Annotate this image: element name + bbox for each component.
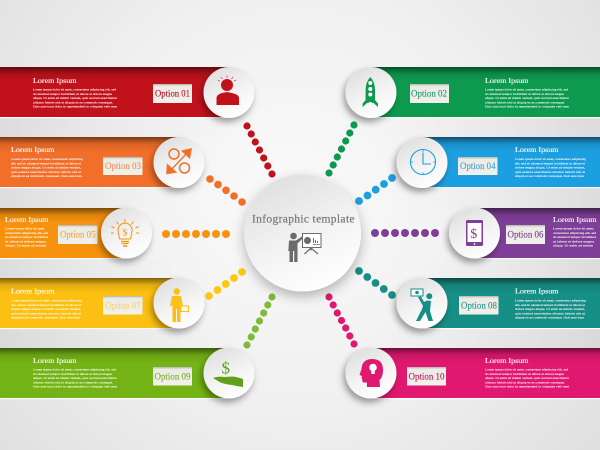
body text: aliqua. Ut enim ad minim (553, 244, 593, 248)
icon: hand with dollar (213, 358, 243, 387)
dotted connector: blue (355, 174, 396, 205)
body text: do eiusmod tempor incididunt ut labore et dolore magna (485, 92, 565, 96)
panel: option 07 (0, 278, 204, 328)
body text: elit, sed do eiusmod tempor incididunt ut labore et (11, 303, 81, 308)
body text: aliquip ex ea commodo consequat. Duis aute irure (11, 174, 83, 178)
heading: Lorem Ipsum (515, 286, 558, 296)
option label (459, 296, 498, 314)
body text: dolore magna aliqua. Ut enim ad minim veniam, (515, 307, 585, 312)
option label (153, 84, 192, 103)
icon: idea bulb with dollar: $ (123, 228, 128, 238)
icon: businessman with case (170, 288, 188, 322)
body text: Lorem ipsum dolor sit amet, consectetur adipiscing elit, sed (485, 88, 568, 92)
body text: do eiusmod tempor incididunt (5, 235, 48, 239)
option label (410, 84, 449, 103)
icon disc (154, 137, 204, 188)
body text: do eiusmod tempor incididunt (553, 235, 596, 239)
option label: Option 08 (461, 302, 497, 312)
option label: Option 06 (508, 230, 544, 240)
option label (458, 157, 498, 175)
dotted connector: pink (325, 293, 358, 348)
body text: elit, sed do eiusmod tempor incididunt ut labore et (515, 161, 585, 166)
body text: quis nostrud exercitation ullamco laboris nisi ut (515, 170, 585, 174)
icon disc (396, 137, 448, 188)
title: Infographic template (252, 214, 354, 226)
body text: do eiusmod tempor incididunt ut labore et dolore magna (33, 372, 113, 376)
panel: option 05 (0, 208, 152, 258)
option label: Option 01 (155, 90, 190, 100)
option label: Option 07 (106, 302, 141, 312)
body text (11, 298, 82, 320)
panel: option 01 (0, 67, 254, 118)
heading: Lorem Ipsum (11, 286, 54, 296)
panel: option 10 (346, 348, 600, 398)
body text: quis nostrud exercitation ullamco laboris nisi ut (11, 170, 81, 174)
dotted connector: green (325, 121, 358, 177)
body text (485, 368, 570, 388)
icon disc (204, 348, 254, 398)
body text: ullamco laboris nisi ut aliquip ex ea commodo consequat. (33, 380, 113, 384)
icon: man holding banknote (411, 289, 433, 321)
icon disc (101, 208, 152, 258)
icon: phone with dollar (466, 220, 483, 246)
body text (515, 157, 586, 178)
heading: Lorem Ipsum (5, 215, 48, 224)
icon disc (346, 67, 396, 118)
icon: percent arrows (167, 149, 191, 174)
body text: ut labore et dolore magna (553, 239, 595, 243)
panel: option 06 (449, 208, 600, 258)
body text: ullamco laboris nisi ut aliquip ex ea commodo consequat. (485, 100, 565, 104)
dotted connector: teal (355, 267, 396, 299)
body text: aliquip ex ea commodo consequat. Duis aute irure (515, 174, 584, 178)
body text: quis nostrud exercitation ullamco laboris nisi ut (515, 311, 585, 315)
body text: ullamco laboris nisi ut aliquip ex ea commodo consequat. (33, 100, 113, 104)
icon disc (204, 67, 254, 118)
dotted connector: orange (206, 175, 246, 206)
option label: Option 05 (60, 230, 96, 240)
body text: aliqua. Ut enim ad minim veniam, quis nostrud exercitation (33, 96, 117, 101)
option label (58, 225, 98, 244)
dotted connector: amber (162, 230, 230, 238)
heading: Lorem Ipsum (33, 76, 76, 85)
body text (11, 157, 83, 178)
body text (515, 298, 586, 320)
body text: Lorem ipsum dolor sit amet, consectetur adipiscing elit, sed (485, 368, 568, 372)
option label: Option 03 (105, 162, 141, 172)
body text: elit, sed do eiusmod tempor incididunt ut labore et (515, 303, 585, 308)
heading: Lorem Ipsum (485, 76, 528, 85)
body text: Lorem ipsum dolor sit amet, consectetur adipiscing (11, 298, 82, 304)
body text: Lorem ipsum dolor sit amet, (5, 226, 45, 232)
body text: dolore magna aliqua. Ut enim ad minim veniam, (11, 166, 81, 170)
panel: option 02 (346, 67, 600, 118)
body text: aliqua. Ut enim ad minim veniam, quis nostrud exercitation (33, 376, 117, 381)
option label: Option 04 (460, 162, 496, 172)
dotted connector: red (243, 122, 276, 178)
option label: Option 10 (408, 372, 445, 382)
body text: consectetur adipiscing elit, sed (553, 231, 596, 236)
option label (407, 367, 446, 386)
body text: consectetur adipiscing elit, sed (5, 231, 48, 236)
body text: aliqua. Ut enim ad minim veniam, quis nostrud exercitation (485, 96, 569, 101)
icon disc (449, 208, 500, 258)
heading: Lorem Ipsum (33, 356, 76, 365)
panel: option 03 (0, 137, 204, 188)
body text: ullamco laboris nisi ut aliquip ex ea commodo consequat. (485, 380, 565, 384)
body text: aliquip ex ea commodo consequat. Duis aute irure (11, 316, 80, 320)
body text: Lorem ipsum dolor sit amet, consectetur adipiscing (515, 298, 586, 304)
body text (485, 88, 570, 108)
body text: dolore magna aliqua. Ut enim ad minim veniam, (515, 166, 585, 170)
icon: phone with dollar: $ (470, 227, 477, 242)
icon: presenter at board (288, 233, 321, 262)
dotted connector: light green (243, 293, 276, 349)
panel: option 08 (396, 278, 600, 328)
icon: head with bulb (360, 359, 383, 387)
heading: Lorem Ipsum (515, 145, 558, 154)
icon disc (346, 348, 396, 398)
option label (506, 225, 545, 244)
heading: Lorem Ipsum (485, 356, 528, 365)
panel: option 09 (0, 348, 254, 398)
body text (553, 226, 596, 248)
option label: Option 09 (154, 372, 191, 382)
option label: Option 02 (411, 90, 447, 100)
icon: hand with dollar: $ (222, 358, 230, 378)
icon: rocket (363, 77, 378, 107)
body text: Lorem ipsum dolor sit amet, consectetur adipiscing elit, sed (33, 368, 116, 372)
body text (5, 226, 48, 248)
central circle (244, 174, 361, 292)
body text: elit, sed do eiusmod tempor incididunt ut labore et (11, 161, 81, 166)
option label (103, 296, 142, 314)
body text: Lorem ipsum dolor sit amet, consectetur adipiscing (11, 157, 83, 162)
body text: ut labore et dolore magna (5, 239, 47, 243)
heading: Lorem Ipsum (553, 215, 596, 224)
dotted connector: yellow (205, 268, 246, 300)
icon: idea bulb with dollar (111, 219, 139, 246)
body text: do eiusmod tempor incididunt ut labore et dolore magna (485, 372, 565, 376)
body text: Lorem ipsum dolor sit amet, (553, 226, 594, 232)
body text: Duis aute irure dolor in reprehenderit in voluptate velit esse (485, 104, 570, 108)
body text: Duis aute irure dolor in reprehenderit in voluptate velit esse (485, 384, 570, 388)
body text: quis nostrud exercitation ullamco laboris nisi ut (11, 311, 81, 315)
body text: aliqua. Ut enim ad minim (5, 244, 46, 248)
icon: clock (410, 150, 436, 174)
icon disc (154, 278, 204, 328)
body text: aliqua. Ut enim ad minim veniam, quis nostrud exercitation (485, 376, 569, 381)
body text: Lorem ipsum dolor sit amet, consectetur adipiscing (515, 157, 586, 162)
body text (33, 88, 118, 108)
heading: Lorem Ipsum (11, 145, 54, 154)
panel: option 04 (396, 137, 600, 188)
body text: Lorem ipsum dolor sit amet, consectetur adipiscing elit, sed (33, 88, 116, 92)
icon disc (396, 278, 448, 328)
icon: person with idea (216, 76, 239, 105)
body text: dolore magna aliqua. Ut enim ad minim veniam, (11, 307, 81, 312)
body text: do eiusmod tempor incididunt ut labore et dolore magna (33, 92, 113, 96)
body text: aliquip ex ea commodo consequat. Duis aute irure (515, 316, 584, 320)
body text (33, 368, 118, 388)
option label (153, 367, 192, 386)
option label (103, 157, 142, 175)
body text: Duis aute irure dolor in reprehenderit in voluptate velit esse (33, 104, 118, 108)
dotted connector: purple (371, 229, 439, 237)
body text: Duis aute irure dolor in reprehenderit in voluptate velit esse (33, 384, 118, 388)
